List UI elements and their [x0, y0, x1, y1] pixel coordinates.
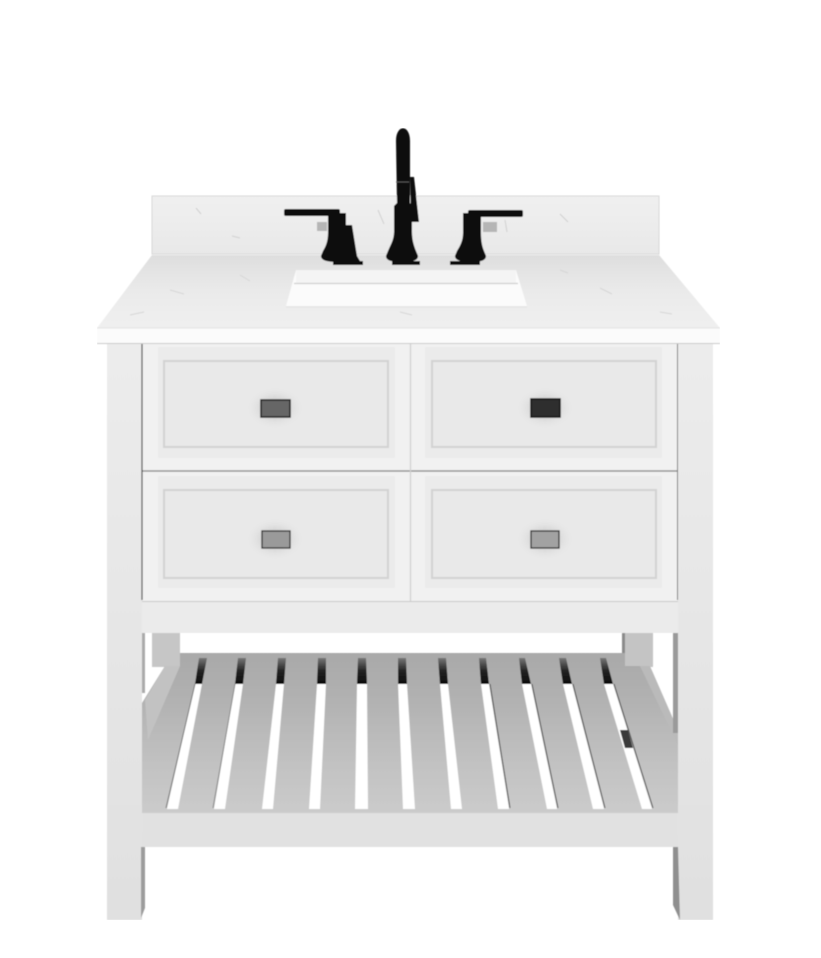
faucet: left handle [284, 209, 363, 265]
faucet: centre spout [386, 128, 420, 265]
undermount sink [286, 270, 527, 307]
drawer handle [515, 517, 575, 561]
drawer handle [245, 386, 305, 430]
faucet: right handle [450, 210, 523, 265]
vanity artwork [97, 128, 720, 920]
upper front rail [142, 602, 678, 633]
drawer: bottom right [411, 472, 678, 601]
drawer: bottom left [142, 472, 410, 601]
backsplash [152, 196, 659, 254]
right front leg [673, 344, 713, 920]
lower front rail [142, 813, 678, 847]
shelf gaps: dark upper section [195, 658, 613, 684]
drawer handle [515, 386, 575, 430]
drawer: top right [411, 344, 678, 470]
drawer handle [245, 517, 305, 561]
slatted lower shelf [142, 653, 678, 813]
back legs [152, 633, 653, 667]
shelf gaps: white lower section [167, 684, 652, 809]
countertop [97, 255, 720, 344]
drawer: top left [142, 344, 410, 470]
drawer gaps [142, 344, 678, 602]
shelf gap shadow lines [166, 684, 653, 808]
left front leg [107, 344, 145, 920]
